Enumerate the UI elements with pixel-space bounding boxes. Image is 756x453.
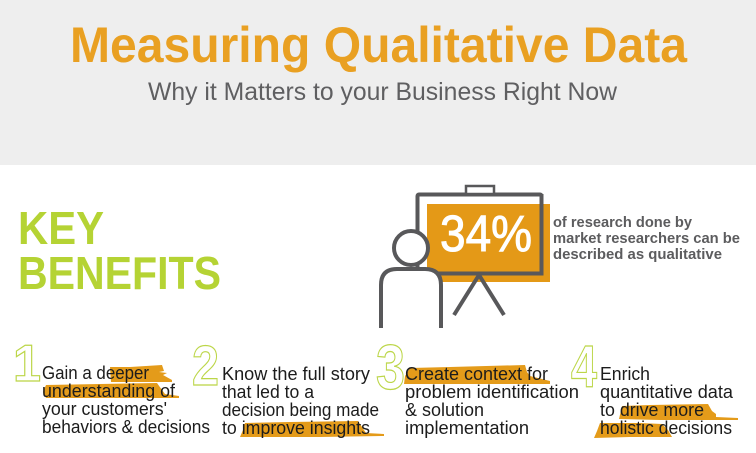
benefit 1: understanding of — [42, 381, 176, 401]
benefit 1: Gain a deeper — [42, 363, 149, 383]
subtitle: Why it Matters to your Business Right Now — [148, 78, 618, 106]
benefit 2 — [192, 334, 384, 438]
heading: key benefits — [18, 202, 221, 299]
benefit 4: holistic decisions — [600, 418, 732, 438]
statistic: 34%: 34% — [440, 205, 532, 262]
heading: key benefits: BENEFITS — [18, 247, 221, 299]
benefit 4: to drive more — [600, 400, 704, 420]
heading: key benefits: KEY — [18, 202, 104, 254]
benefit 4: 4 — [571, 334, 597, 400]
statistic description — [553, 215, 740, 263]
title: Measuring Qualitative Data — [70, 17, 688, 73]
benefit 3: 3 — [376, 333, 405, 403]
icon: presenter at board with statistic — [381, 186, 550, 328]
statistic description: described as qualitative — [553, 247, 722, 263]
benefit 2: Know the full story — [222, 364, 370, 384]
benefit 2: that led to a — [222, 382, 315, 402]
statistic description: market researchers can be — [553, 231, 740, 247]
benefit 3: Create context for — [405, 364, 548, 384]
benefit 2: 2 — [192, 334, 219, 398]
statistic description: of research done by — [553, 215, 693, 231]
benefit 3: implementation — [405, 418, 529, 438]
benefit 3 — [376, 333, 579, 438]
benefit 2: to improve insights — [222, 418, 370, 438]
benefit 2: decision being made — [222, 400, 379, 420]
benefit 3: problem identification — [405, 382, 579, 402]
benefit 4: Enrich — [600, 364, 650, 384]
benefit 1: 1 — [13, 335, 41, 393]
benefit 4 — [571, 334, 738, 438]
benefit 1 — [13, 335, 210, 437]
benefit 4: quantitative data — [600, 382, 734, 402]
benefit 1: behaviors & decisions — [42, 417, 210, 437]
benefit 1: your customers' — [42, 399, 167, 419]
benefit 3: & solution — [405, 400, 484, 420]
